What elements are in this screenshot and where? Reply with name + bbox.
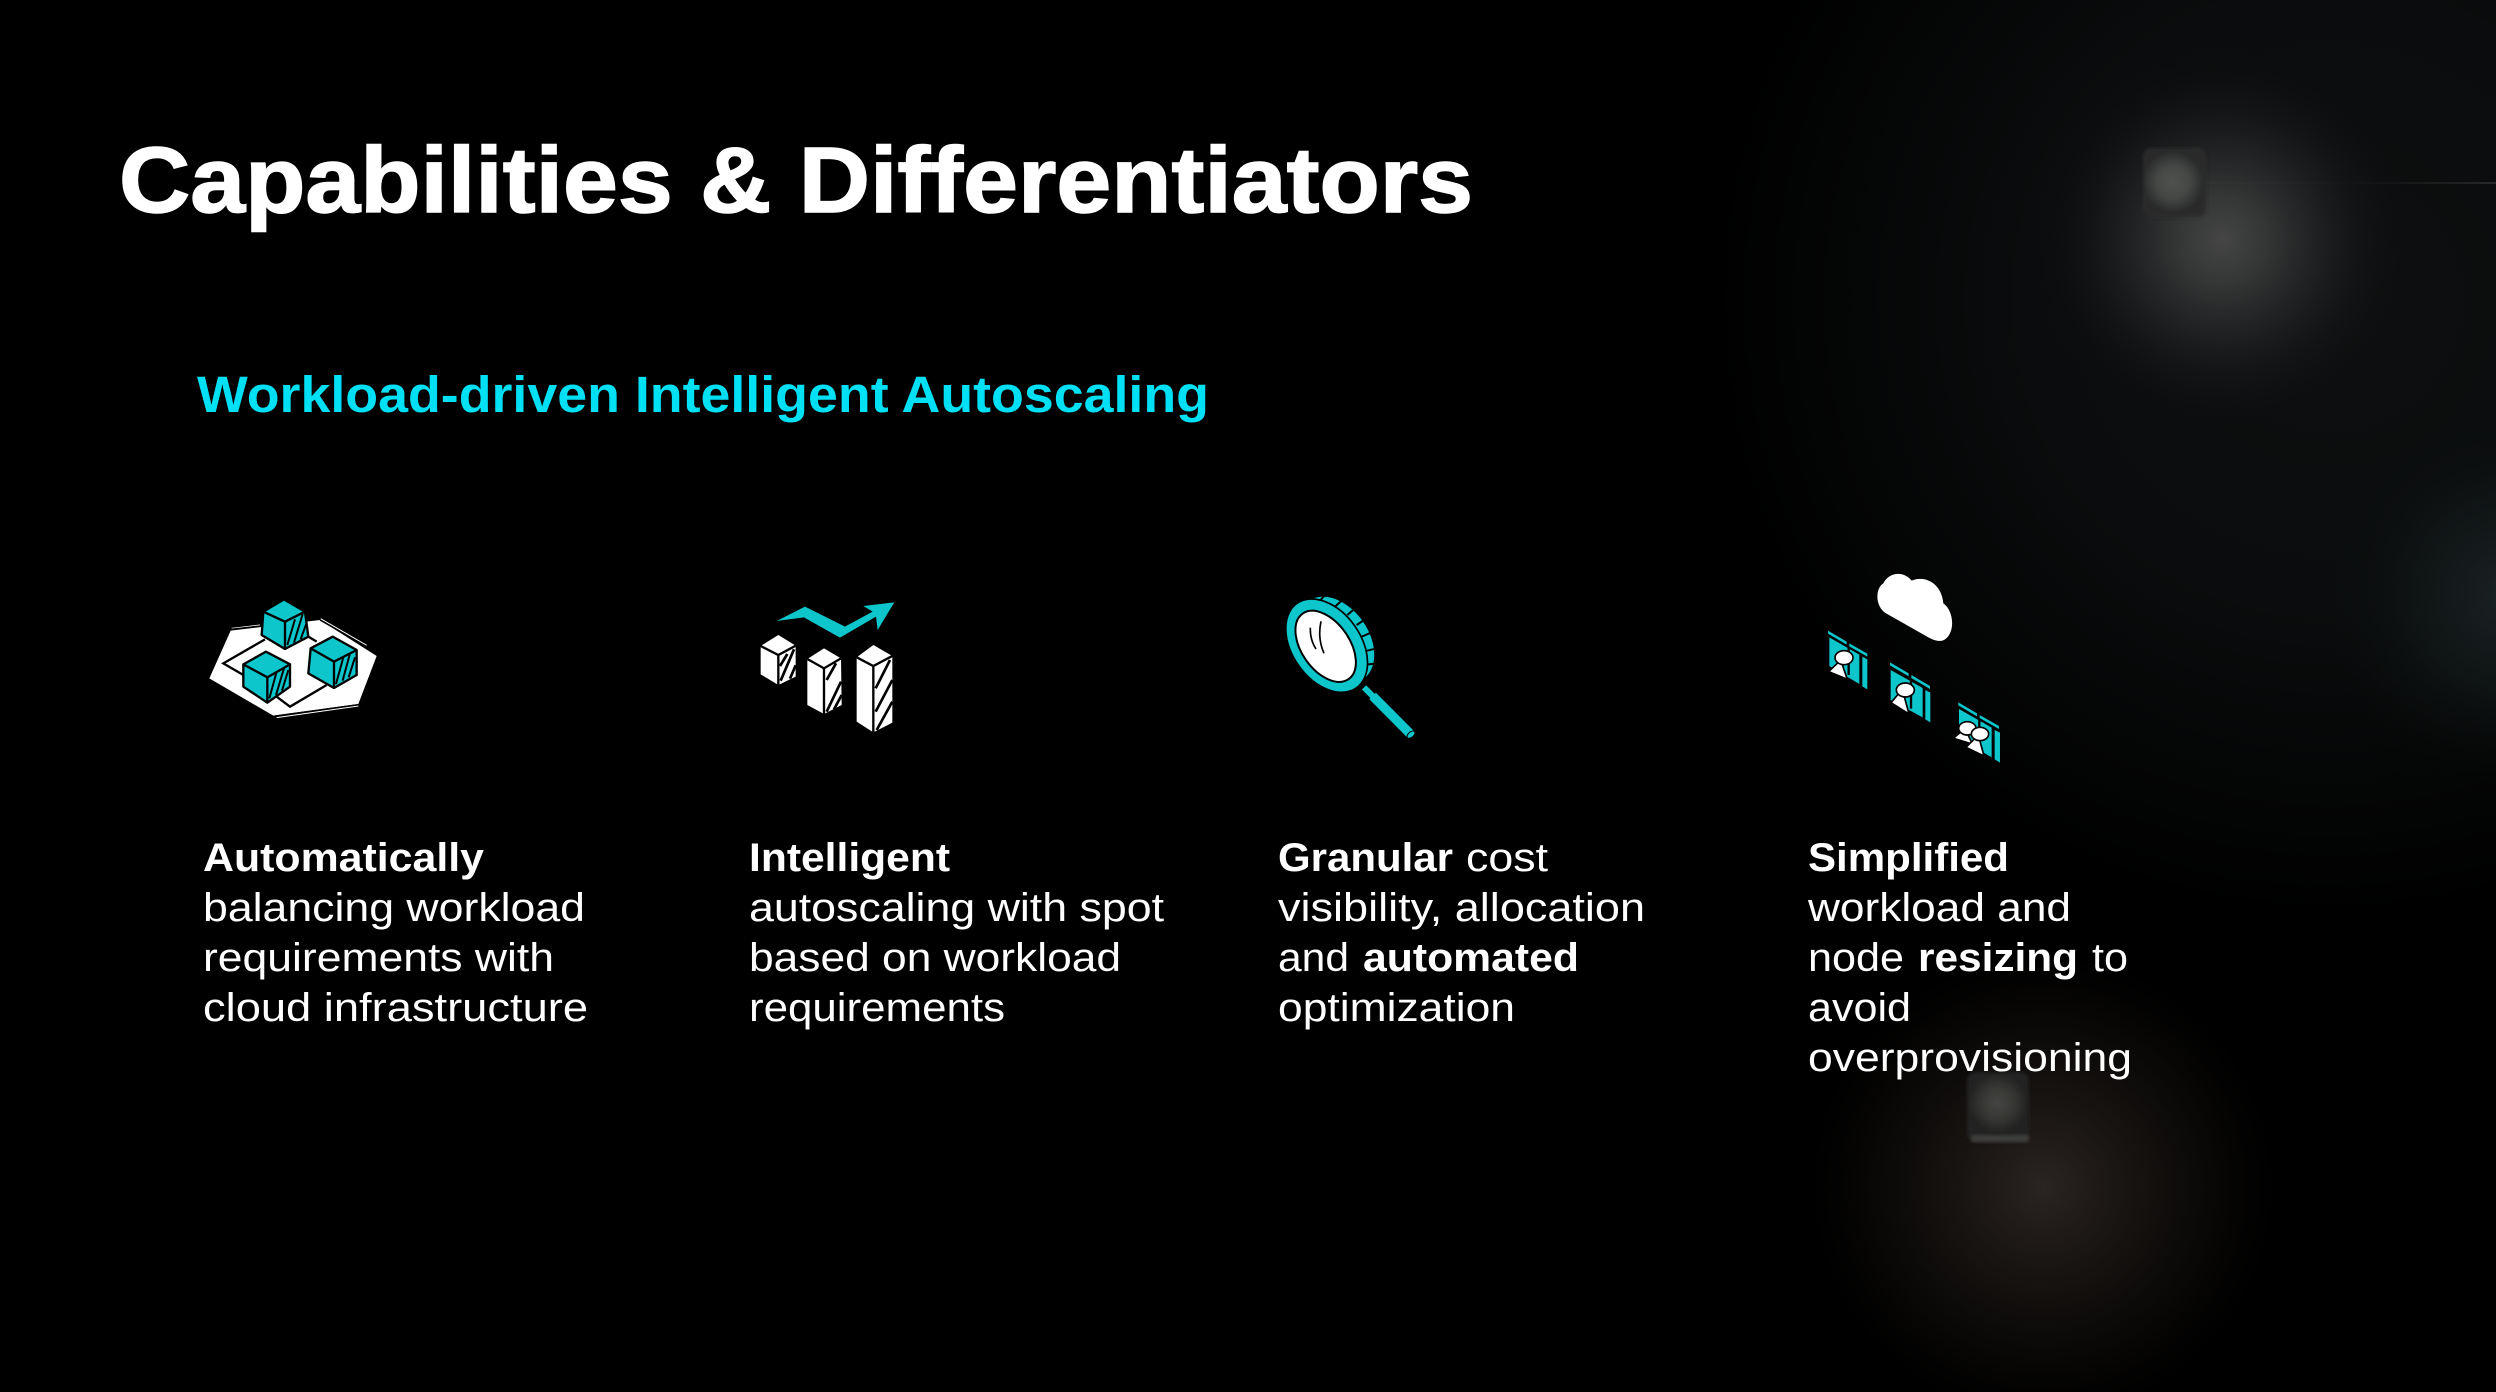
panel: automatic balancing: [203, 599, 588, 1030]
text: simplified resizing: avoid: [1808, 986, 1911, 1030]
text: granular cost visibility: Granular: [1278, 836, 1453, 880]
text: automatic balancing: [203, 836, 588, 1030]
text: granular cost visibility: visibility, allocation: [1278, 886, 1645, 930]
text: simplified resizing: overprovisioning: [1808, 1036, 2132, 1080]
text: intelligent autoscaling: Intelligent: [749, 836, 950, 880]
subtitle: Workload-driven Intelligent Autoscaling: [197, 366, 1209, 423]
panel: intelligent autoscaling: [749, 602, 1164, 1030]
text: simplified resizing: [1807, 836, 2132, 1080]
text: simplified resizing: resizing: [1918, 936, 2078, 980]
text: automatic balancing: requirements with: [203, 936, 554, 980]
text: automatic balancing: Automatically: [203, 836, 485, 880]
text: granular cost visibility: cost: [1466, 836, 1548, 880]
text: intelligent autoscaling: based on workload: [749, 936, 1121, 980]
icon: magnifying glass: [1269, 582, 1416, 740]
panel: simplified resizing: [1807, 574, 2132, 1080]
text: automatic balancing: cloud infrastructure: [203, 986, 588, 1030]
text: granular cost visibility: [1278, 836, 1645, 1030]
text: simplified resizing: workload and: [1807, 886, 2071, 930]
text: automatic balancing: balancing workload: [203, 886, 585, 930]
text: intelligent autoscaling: autoscaling with spot: [749, 886, 1164, 930]
text: granular cost visibility: and: [1278, 936, 1349, 980]
text: simplified resizing: to: [2092, 936, 2128, 980]
text: intelligent autoscaling: [749, 836, 1164, 1030]
icon: cubes on a hexagonal platform: [209, 599, 377, 718]
text: simplified resizing: Simplified: [1808, 836, 2009, 880]
text: granular cost visibility: optimization: [1278, 986, 1515, 1030]
panel: granular cost visibility: [1269, 582, 1645, 1030]
icon: rising bars with arrow: [761, 602, 894, 732]
text: simplified resizing: node: [1808, 936, 1904, 980]
text: intelligent autoscaling: requirements: [749, 986, 1005, 1030]
text: granular cost visibility: automated: [1363, 936, 1579, 980]
icon: cloud with three node windows: [1828, 574, 2000, 763]
title: Capabilities & Differentiators: [119, 128, 1473, 232]
